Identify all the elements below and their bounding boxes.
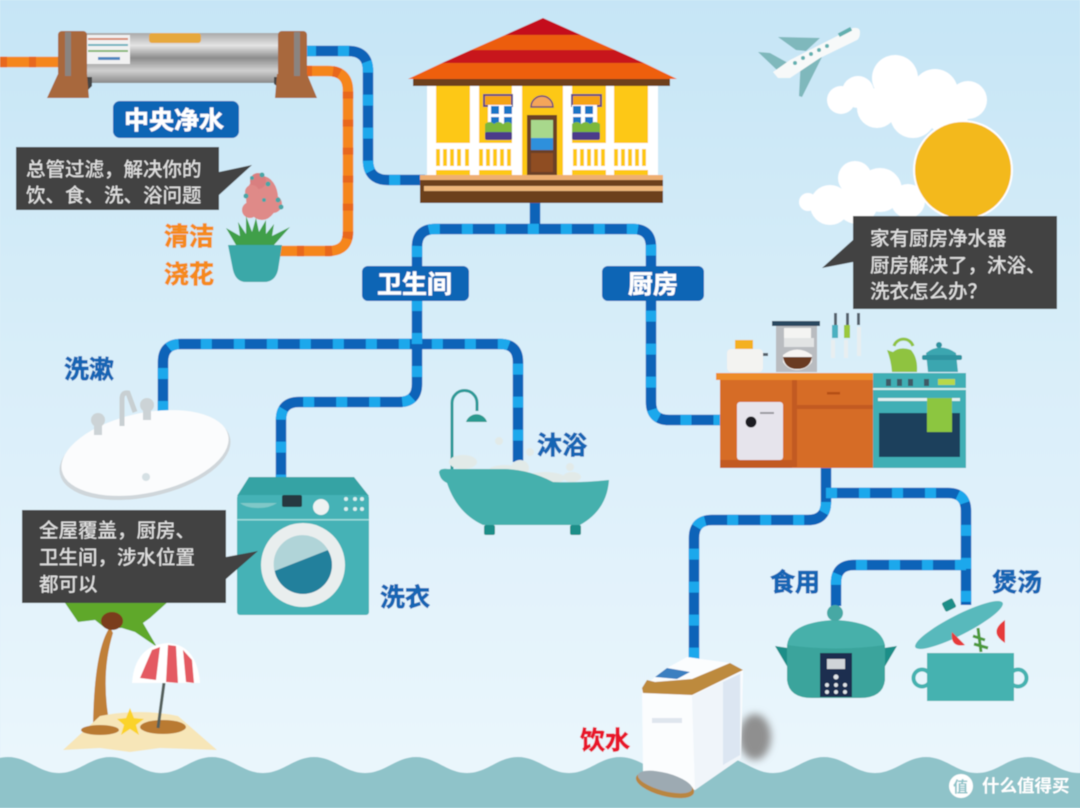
filter brand sticker (149, 33, 201, 43)
countertop (716, 373, 873, 380)
fanlight (531, 96, 553, 107)
palm leaves (63, 600, 170, 647)
water dispenser (633, 657, 771, 803)
shower pipe (452, 390, 477, 470)
bathtub with shower (439, 390, 609, 535)
clamp shadows (84, 77, 282, 90)
icon: airplane (758, 27, 860, 97)
right pot handle (1010, 670, 1026, 686)
palm tree (63, 600, 170, 727)
upper cloud (827, 55, 987, 138)
callout: kitchen filter only (822, 216, 1057, 309)
tomato slices (952, 620, 1005, 645)
left copper clamp (47, 31, 89, 98)
pot handles (914, 670, 930, 686)
kettle (887, 339, 917, 372)
roof (408, 18, 677, 86)
door (527, 115, 557, 175)
label: eating: 食用 (770, 568, 820, 597)
tub feet (484, 525, 495, 535)
house wall (427, 85, 658, 177)
label: drinking water: 饮水 (580, 727, 630, 755)
orange garden pipe (280, 71, 348, 251)
blue screen (655, 668, 690, 679)
pot body (927, 653, 1014, 701)
callout: whole house coverage (22, 510, 258, 603)
cooking pot on stove (922, 342, 962, 372)
tag: kitchen: 厨房 (628, 271, 678, 299)
filter label (86, 35, 130, 64)
sink (51, 393, 239, 514)
herb (973, 628, 988, 652)
hanging utensils (832, 313, 860, 358)
lid (911, 594, 1007, 656)
dispenser shadow (739, 714, 771, 760)
pipe: bathroom branches (163, 300, 518, 478)
palm trunk (93, 627, 113, 727)
label: watering flowers: 浇花 (164, 261, 214, 289)
right knob (140, 398, 154, 420)
label: bathing: 沐浴 (537, 432, 587, 460)
lower cloud (799, 161, 925, 225)
cabinet (720, 378, 873, 468)
callout: whole house filtering: 总管过滤，解决你的 (26, 159, 202, 181)
tag: kitchen (602, 266, 704, 301)
pipe: house to bathroom and kitchen (417, 203, 722, 420)
tag: central water (113, 101, 239, 138)
display (282, 495, 302, 507)
cooker knob (827, 605, 843, 621)
callout: kitchen filter only: 厨房解决了，沐浴、 (870, 255, 1046, 277)
coffee machine (772, 321, 820, 372)
tag: bathroom (362, 266, 469, 301)
porch railings (436, 149, 646, 166)
tag: bathroom: 卫生间 (377, 271, 452, 299)
callout: whole house filtering: 饮、食、洗、浴问题 (26, 185, 202, 207)
watermark (949, 774, 1070, 798)
label: cleaning: 清洁 (164, 223, 214, 251)
beach island (63, 643, 217, 752)
shower head (466, 414, 487, 422)
faucet (122, 393, 135, 426)
right copper clamp (275, 31, 317, 98)
callout: whole house coverage: 卫生间，涉水位置 (39, 547, 195, 569)
foam (449, 437, 581, 484)
blue main pipe from filter to house (305, 51, 425, 180)
buttons (344, 497, 364, 511)
left window (484, 95, 512, 140)
callout: whole house coverage: 都可以 (39, 574, 98, 596)
soup pot (911, 594, 1026, 701)
dial (313, 499, 329, 515)
yellow wall panels (436, 86, 648, 176)
sun (913, 120, 1013, 220)
label: washing up: 洗漱 (64, 356, 114, 384)
pot (228, 245, 282, 282)
watermark: 什么值得买 (982, 776, 1070, 796)
callout: whole house coverage: 全屋覆盖，厨房、 (39, 520, 195, 542)
under-sink purifier (737, 402, 783, 460)
cooker body (787, 645, 885, 698)
cooker lid (787, 620, 885, 648)
label: laundry: 洗衣 (380, 584, 430, 612)
central water filter (47, 31, 317, 98)
tub (439, 469, 609, 525)
sea waves (0, 757, 1080, 808)
callout: whole house filtering (16, 147, 252, 210)
callout: kitchen filter only: 家有厨房净水器 (870, 228, 1007, 250)
foundation (420, 175, 663, 203)
oven (873, 373, 966, 468)
left knob (91, 413, 105, 435)
right window (572, 95, 601, 140)
water pipes (0, 51, 966, 660)
control panel (820, 653, 852, 697)
callout: kitchen filter only: 洗衣怎么办？ (870, 281, 987, 303)
orange inlet pipe (0, 57, 62, 67)
washing machine (237, 477, 369, 615)
pipe: kitchen branches (694, 468, 966, 660)
tag: central water: 中央净水 (124, 107, 224, 135)
water outlet (652, 718, 682, 723)
watermark: 值 (953, 779, 968, 796)
rice cooker (775, 605, 897, 698)
cooker handles (775, 646, 897, 668)
right side panel (723, 674, 740, 765)
toaster (727, 340, 768, 372)
gold trim (642, 663, 743, 695)
dispenser body (642, 657, 743, 790)
lid knob (941, 598, 957, 612)
icon: potted flower (226, 172, 290, 282)
kitchen counter and appliances (716, 313, 966, 468)
grass (226, 216, 290, 245)
umbrella pole (158, 683, 164, 728)
flower (242, 172, 284, 220)
starfish (117, 708, 144, 735)
umbrella (132, 643, 200, 683)
house (408, 18, 677, 203)
steel cylinder (80, 33, 285, 83)
drip tray (633, 766, 697, 803)
door (261, 523, 345, 607)
label: soup: 煲汤 (992, 569, 1042, 597)
coconut (101, 612, 123, 630)
